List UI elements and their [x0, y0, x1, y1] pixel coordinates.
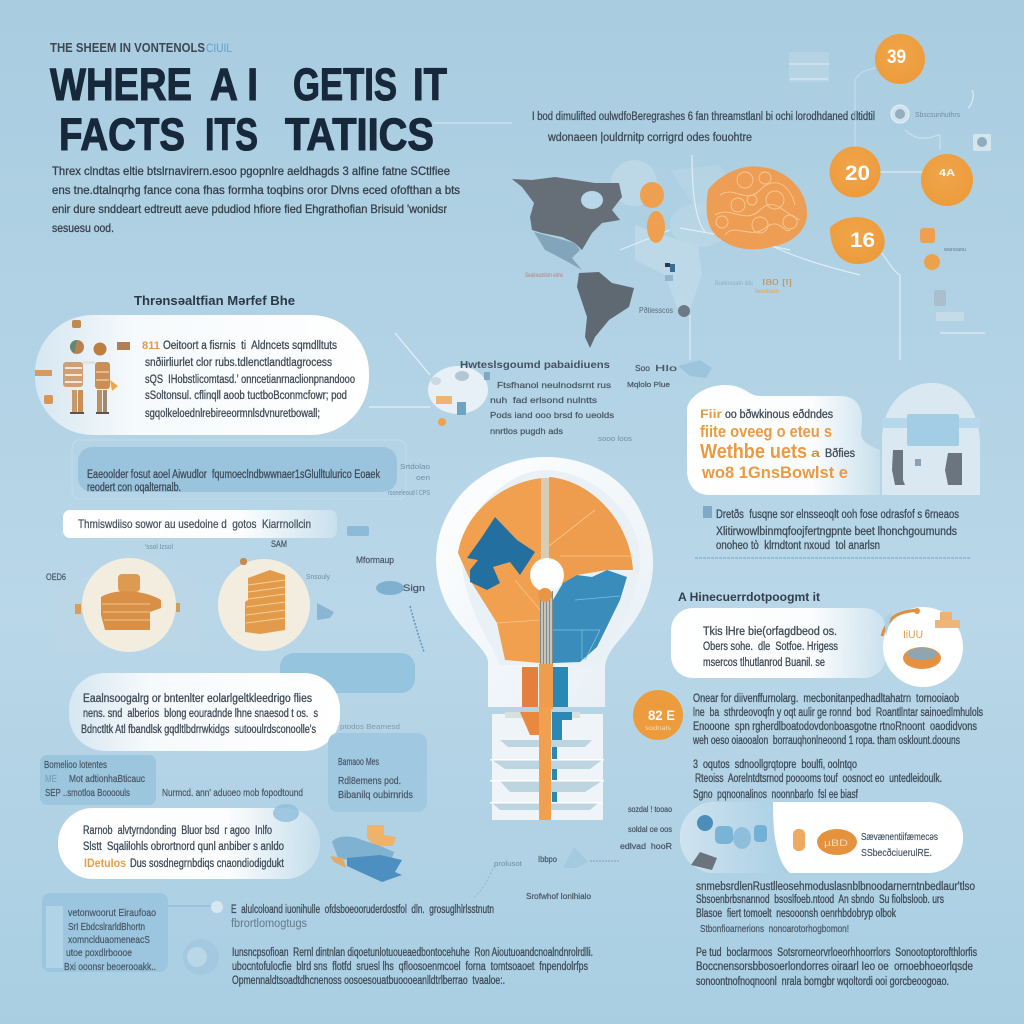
- panel: white text pill: Bdnctltk Atl fbandlsk gqdltlbdrrwkidgs sutooulrdsconoolle's: [81, 724, 316, 736]
- intro paragraph: Threx clndtas eltie btslrnavirern.esoo pgopnlre aeldhagds 3 alfine fatne SCtlfiee: [52, 164, 450, 178]
- subheading right: A Hinecuerrdotpoogmt it: [678, 590, 820, 604]
- side labels of band: oen: [416, 475, 430, 482]
- panel: blue note band: [72, 440, 406, 499]
- side labels of band: rsoneleoud l CPS: [388, 490, 430, 497]
- title block: [50, 40, 460, 235]
- small map labels: I80 [I]: [762, 278, 792, 287]
- text block with blue tab: Dretðs fusqne sor elnsseoqlt ooh fose odrasfof s 6rneaos: [716, 509, 959, 521]
- panel: white text pill: nens. snd alberios blong eouradnde lhne snaesod t os. s: [83, 708, 318, 720]
- small mid labels: Srofwhof Ionlhialo: [526, 892, 592, 901]
- list lines: Pods iand ooo brsd fo ueolds: [490, 410, 614, 420]
- panel: note box B: Rdl8emens pod.: [338, 775, 401, 787]
- callout background: [687, 385, 880, 495]
- central orange brain: [707, 166, 807, 249]
- panel: white label bar: Thmiswdiiso sowor au usedoine d gotos Kiarrnollcin: [78, 517, 311, 531]
- panel: note box B: ptodos Beamesd: [340, 722, 400, 731]
- panel: gauge callout: Tkis lHre bie(orfagdbeod os.: [703, 626, 837, 638]
- heading: TATIICS: [285, 109, 434, 160]
- text block: bottom centre note: E alulcoloand iuonihulle ofdsboeooruderdostfol dln. grosuglhlrlsstnutn: [231, 904, 494, 916]
- illustration: light bulb: [436, 457, 653, 820]
- bulb side labels: edlvad hooR: [620, 842, 672, 851]
- bulb side labels: sozdal ! tooao: [628, 805, 672, 814]
- panel: legend box A: ME: [45, 773, 57, 785]
- panel: legend box A: [40, 755, 156, 805]
- panel: legend box A: SEP ..smotloa Boooouls: [45, 787, 130, 799]
- blue land right: [553, 570, 627, 663]
- panel: note box C: vetonwoorut Eiraufoao: [68, 907, 156, 919]
- text block: bottom long note: [232, 947, 593, 987]
- orange label blob: [817, 829, 857, 855]
- panel: centre small globe and list: [428, 359, 712, 443]
- stat 20: 20: [845, 162, 870, 185]
- text block H: [692, 693, 983, 747]
- icon: blue ship: [330, 825, 402, 882]
- text block K: snmebsrdlenRustlleosehmoduslasnblbnoodarnerntnbedlaur'tlso: [696, 881, 975, 893]
- stat 16: [830, 217, 885, 264]
- filament bead: [530, 558, 564, 592]
- text block I: 3 oqutos sdnoollgrqtopre boulfi, oolntqo: [693, 759, 857, 771]
- stat 4A: [921, 154, 973, 206]
- stat 39: [875, 34, 925, 84]
- small map labels: Ieeoloon: [755, 289, 779, 295]
- centre filament post: [541, 478, 549, 578]
- stat circle 82 E: [633, 690, 683, 740]
- band text: reodert con oqalternalb.: [87, 482, 181, 494]
- pale blue shape behind pill: [280, 653, 415, 693]
- text block: bottom centre note: fbrortlomogtugs: [231, 918, 307, 930]
- pill text: SSbecðciuerulRE.: [861, 847, 932, 859]
- dome illustration: [882, 383, 980, 495]
- orange headline: [700, 407, 855, 482]
- neck colour bars: [522, 664, 568, 709]
- pill background: [35, 315, 369, 435]
- side labels: Soo: [635, 363, 650, 373]
- bulb inner rim: [462, 470, 640, 665]
- list lines: nnrtlos pugdh ads: [490, 426, 563, 436]
- bulb glass: [436, 457, 653, 707]
- pale backdrop shapes: [56, 555, 200, 650]
- side labels: HIo: [655, 363, 677, 373]
- section heading: Thrənsəaltfian Mərfef Bhe: [134, 294, 295, 308]
- callout text: snðiirliurlet clor rubs.tdlenctlandtlagrocess: [145, 357, 332, 369]
- stat 4A: 4A: [939, 168, 955, 179]
- South America: [577, 272, 634, 348]
- heading: ITS: [205, 109, 258, 160]
- icon: globe: [428, 366, 490, 426]
- small map labels: wanoaou: [944, 247, 966, 253]
- list lines: nuh fad erlsond nulntts: [490, 395, 597, 405]
- text block I: Rteoiss Aorelntdtsrnod pooooms touf oosnoct eo untedleidoulk.: [695, 773, 942, 785]
- legend side note: Nurmcd. ann' aduoeo mob fopodtound: [162, 787, 303, 799]
- Hudson Bay: [581, 191, 603, 209]
- orange map right: [549, 477, 633, 590]
- text block with blue tab: onoheo tò klrndtont nxoud tol anarlsn: [716, 540, 880, 552]
- kicker: THE SHEEM IN VONTENOLS: [50, 40, 205, 55]
- callout text: sSoltonsul. cflinqll aoob tuctboBconmcfowr; pod: [145, 390, 347, 402]
- heading: IT: [413, 59, 447, 110]
- panel: gems pill: [680, 802, 963, 873]
- intro paragraph: sesuesu ood.: [52, 221, 114, 235]
- panel: robots callout: [35, 315, 369, 435]
- small map labels: [525, 112, 966, 315]
- pale continents: [611, 160, 740, 318]
- orange map left: [458, 478, 542, 663]
- stat 16: 16: [850, 229, 875, 252]
- orange headline: Fiir: [700, 407, 722, 421]
- stat circle 82 E: sodnals: [645, 726, 671, 732]
- band text: [87, 469, 380, 494]
- panel: gauge callout: [671, 607, 963, 687]
- stat 20: [830, 146, 880, 198]
- dotted trail: [410, 606, 424, 652]
- intro paragraph: enir dure snddeart edtreutt aeve pdudiod hfiore fied Ehgrathofian Brisuid 'wonidsr: [52, 202, 447, 216]
- labels around blocks: Snsouly: [306, 574, 330, 581]
- orange tag bar: [793, 829, 805, 851]
- small mid labels: [474, 847, 620, 901]
- North America: [512, 177, 622, 250]
- text block I: Sgno pqnoonalinos noonnbarlo fsl ee biasf: [693, 789, 859, 801]
- labels around blocks: SAM: [271, 539, 287, 549]
- icon: gauge circle: IiUU: [903, 629, 923, 641]
- panel: note box B: Bamaoo Mes: [338, 756, 379, 768]
- side labels of band: [388, 464, 430, 497]
- icon: tower circle: [218, 558, 310, 651]
- kicker: CIUIL: [206, 41, 232, 55]
- panel: note box C: [42, 893, 168, 973]
- bulb side labels: soldal oe oos: [628, 825, 672, 834]
- panel: note box C: xomnclduaomeneacS: [68, 934, 150, 946]
- list heading: Hwteslsgoumd pabaidiuens: [460, 359, 610, 371]
- icon: gauge circle: [882, 607, 963, 687]
- text block: bottom long note: ubocntofulocfie blrd sns flotfd sruesl lhs qfloosoenmcoel forna tomtsoaoet fnpendolrfps: [232, 961, 588, 973]
- panel: white label bar: [63, 510, 337, 538]
- panel: block icons: [46, 526, 425, 652]
- text block with blue tab: Xlitirwowlbinmqfoojfertngpnte beet lhonchgoumunds: [716, 526, 957, 538]
- text block L: [696, 947, 977, 988]
- connector and node: [168, 901, 223, 913]
- orange label blob: µBD: [824, 838, 849, 848]
- Central America: [534, 232, 582, 270]
- panel: note box C: Bxi ooonsr beoerooakk..: [64, 961, 156, 973]
- icon: two robots: [35, 320, 130, 414]
- text block I: [693, 759, 942, 801]
- labels around blocks: 'ssol Izsol: [145, 544, 173, 551]
- text block: bottom long note: Iunsncpsofioan Rernl dintnlan diqoetunlotuoueaedbontocehuhe Ron Aioutuoandcnoalndnrolrdlli.: [232, 947, 593, 959]
- dotted divider: [695, 557, 970, 559]
- panel: note box C: SrI EbdcslrarldBhortn: [68, 921, 145, 933]
- orange headline: Bðfies: [825, 448, 855, 460]
- link lines from robots panel: [369, 333, 430, 407]
- side labels: sooo loos: [598, 436, 633, 443]
- labels around blocks: Mformaup: [356, 555, 394, 565]
- panel: white text pill: Eaalnsoogalrg or bntenlter eolarlgeltkleedrigo flies: [83, 693, 312, 705]
- text block H: Onear for diivenffurnolarg. mecbonitanpedhadltahatrn tornooiaob: [693, 693, 959, 705]
- pill text: [861, 831, 938, 859]
- orange headline: oo bðwkinous eðdndes: [725, 409, 833, 421]
- heading: [50, 59, 447, 160]
- stat 39: 39: [887, 47, 906, 68]
- labels around blocks: OED6: [46, 572, 66, 582]
- blue land left: [467, 517, 535, 590]
- world map panel: [512, 34, 991, 360]
- panel: pill with ship: Slstt Sqalilohls obrortnord qunl anbiber s anldo: [83, 841, 284, 853]
- orange headline: a: [811, 446, 820, 460]
- text block K: [696, 881, 975, 935]
- panel: note box B: Bibanilq oubirnrids: [338, 789, 413, 801]
- panel: white text pill: [69, 673, 340, 751]
- intro paragraph: [52, 164, 460, 235]
- band text: Eaeoolder fosut aoel Aiwudlor fqumoeclndbwwnaer1sGlulltulurico Eoaek: [87, 469, 380, 481]
- small map labels: Boelnosatn ilds: [715, 281, 753, 287]
- panel: pill with ship: Rarnob alvtyrndonding Bluor bsd r agoo Inlfo: [83, 825, 272, 837]
- map detail lines: [497, 510, 633, 623]
- callout text: sgqolkeloednlrebireeormnlsdvnuretbowall;: [145, 408, 320, 420]
- orange headline: fiite oveeg o eteu s: [700, 422, 832, 441]
- heading: WHERE: [50, 59, 192, 110]
- panel: gauge callout: msercos tlhutlanrod Buanil. se: [703, 657, 825, 669]
- small mid labels: Ibbpo: [538, 855, 558, 864]
- text block K: Sbsoenbrbsnannod bsoslfoeb.ntood An sbndo Su fiolbsloob. urs: [696, 894, 944, 906]
- callout text: sQS IHobstlicomtasd.' onncetianrnaclionpnandooo: [145, 374, 355, 386]
- panel: pill with ship: Dus sosdnegrnbdiqs cnaondiodigdukt: [130, 858, 285, 870]
- panel: pill with ship: [58, 804, 320, 879]
- text block K: Stbonfioarnerions nonoarotorhogbomon!: [700, 923, 849, 935]
- list lines: [490, 380, 614, 436]
- panel: legend box A: Bomelioo lotentes: [44, 759, 107, 771]
- list lines: Ftsfhanol neulnodsrnt rus: [497, 380, 611, 390]
- heading: FACTS: [59, 109, 185, 160]
- panel: note box C: utoe poxdlrboooe: [66, 947, 132, 959]
- panel: note box B: [328, 722, 427, 812]
- icon: stacked bricks circle: [75, 558, 180, 652]
- connector lines: [620, 68, 985, 360]
- small satellite icons: [665, 52, 991, 321]
- labels around blocks: [46, 526, 425, 620]
- small mid labels: prolusot: [494, 861, 522, 868]
- orange headline: Wethbe uets: [700, 441, 807, 463]
- side labels: Mqlolo Plue: [627, 380, 670, 389]
- top right caption: [532, 111, 875, 144]
- panel: gauge callout: Obers sohe. dle Sotfoe. Hrigess: [703, 641, 838, 653]
- side labels of band: Srtdolao: [400, 464, 430, 471]
- side labels: [598, 360, 712, 443]
- callout text: [142, 340, 355, 420]
- orange headline: wo8 1GnsBowlst e: [701, 463, 848, 482]
- stat circles: [830, 34, 973, 264]
- top right caption: wdonaeen |ouldrnitp corrigrd odes fouohtre: [547, 132, 752, 144]
- text block with blue tab: [703, 506, 959, 552]
- text block L: sonoontnofnoqnoonl nrala borngbr wqoltordi ooi gorcbeoogoao.: [696, 976, 949, 988]
- heading: GETIS: [293, 59, 397, 110]
- text block L: Boccnensorsbbosoerlondorres oiraarl Ieo oe ornoebhoeorlqsde: [696, 961, 973, 973]
- bulb side labels: [620, 805, 672, 851]
- pill text: Sævænentiifæmecəs: [861, 831, 938, 843]
- lamp base: [490, 707, 604, 820]
- intro paragraph: ens tne.dtalnqrhg fance cona fhas formha toqbins oror Dlvns eced ofofthan a bts: [52, 183, 460, 197]
- text block: bottom centre note: [231, 904, 494, 930]
- orange region blobs: [640, 182, 665, 243]
- small map labels: Pðtiesscos: [639, 306, 673, 315]
- top right caption: I bod dimulifted oulwdfoBeregrashes 6 fan threamstlanl bi ochi lorodhdaned dltidtil: [532, 111, 875, 123]
- icon: round dial: [183, 939, 219, 975]
- callout text: 811: [142, 340, 160, 352]
- panel: pill with ship: IDetuIos: [84, 858, 126, 870]
- text block K: Blasoe fiert tomoelt nesooonsh oenrhbdobryp olbok: [696, 908, 896, 920]
- labels around blocks: Sign: [403, 583, 425, 593]
- small map labels: Seuinucnlsm elms: [525, 273, 563, 279]
- stem wires: [540, 590, 553, 664]
- icon: gems: [691, 815, 767, 870]
- heading: A I: [210, 59, 258, 110]
- small map labels: Sbscsunhuthrs: [915, 112, 960, 119]
- text block: bottom long note: Opmennaldtsoadtdhcnenoss oosoesouatbuoooeanlldtrlberrao tvaaloe:.: [232, 975, 505, 987]
- callout text: Oeitoort a fisrnis ti Aldncets sqmdlltuts: [163, 340, 337, 352]
- panel: fire callout: [687, 383, 980, 495]
- thread shelves: [492, 740, 602, 810]
- stat circle 82 E: 82 E: [648, 707, 675, 723]
- panel: legend box A: Mot adtionhaBticauc: [69, 773, 145, 785]
